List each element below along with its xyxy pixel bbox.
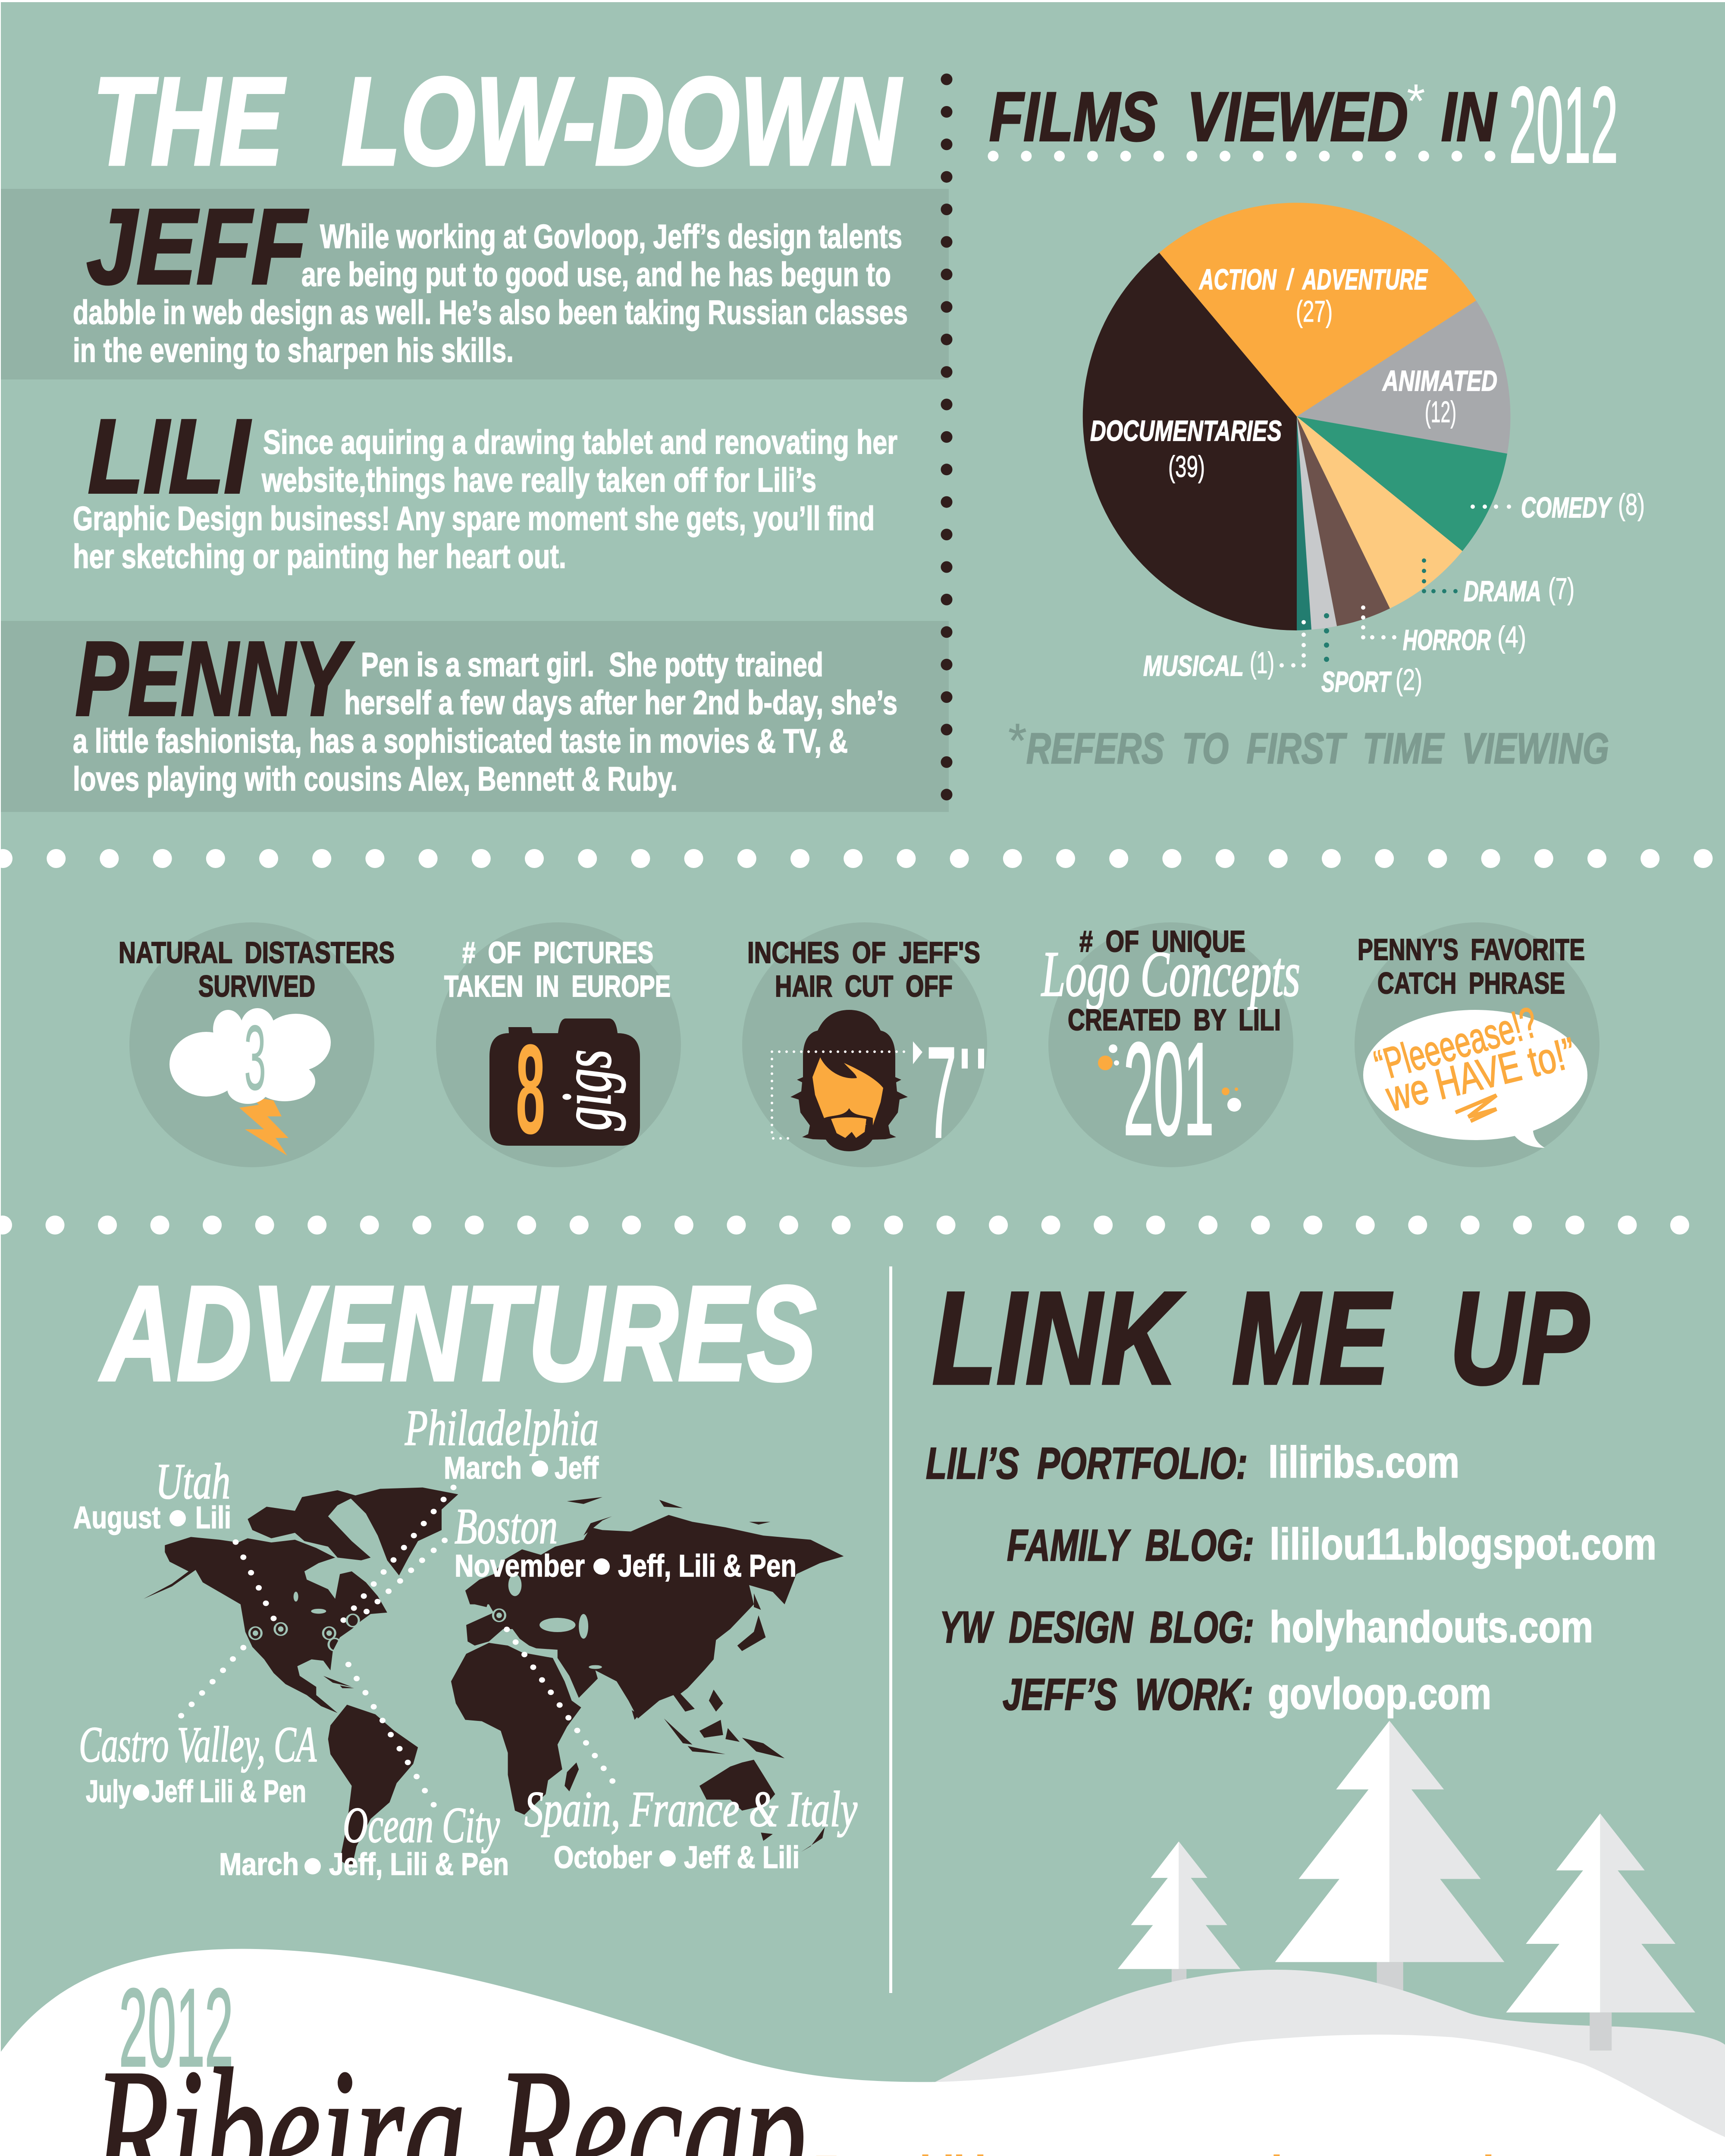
slice: musical [1297, 417, 1311, 630]
profile: Jeff: in the evening to sharpen his skills. [73, 331, 514, 369]
panel: films viewed [989, 65, 1645, 773]
world map [144, 1488, 844, 1868]
panel: ribeira recap [82, 1966, 1653, 2156]
pie labels: (12) [1425, 395, 1456, 429]
link: jeff's work: govloop.com [1268, 1669, 1491, 1718]
stat: logo concepts: 201 [1123, 1015, 1214, 1163]
profile: Lili [73, 398, 897, 575]
right pine tree [1506, 1814, 1695, 2050]
pie labels: DOCUMENTARIES [1090, 415, 1282, 447]
profile: Jeff: JEFF [87, 187, 308, 306]
icon: jeff's face [790, 1010, 908, 1151]
small and large pine trees [1118, 1721, 1505, 1999]
map label: Castro Valley: July [86, 1774, 131, 1809]
heading: films viewed in 2012: IN [1441, 78, 1497, 156]
stat: natural disasters [119, 922, 395, 1167]
stat: logo concepts: # OF UNIQUE [1079, 924, 1245, 958]
heading: link me up [932, 1265, 1589, 1411]
grey snow hill [935, 1970, 1725, 2152]
pie labels: DRAMA [1464, 575, 1541, 608]
speech bubble: we HAVE to!” [1381, 1028, 1580, 1121]
map label: Philadelphia [405, 1400, 599, 1485]
map label: Ocean City: Ocean City [343, 1797, 500, 1853]
map label: Ocean City [219, 1797, 509, 1882]
map label: Castro Valley [79, 1716, 317, 1809]
heading: link me up: LINK [932, 1265, 1185, 1411]
measurement dotted line and arrow [772, 1041, 922, 1138]
heading: films viewed in 2012: FILMS VIEWED [989, 78, 1408, 156]
stat: jeff's hair: HAIR CUT OFF [775, 969, 953, 1003]
profile: Jeff [73, 187, 908, 369]
profile: Penny: Pen is a smart girl. She potty trained [361, 646, 823, 683]
link: yw design blog [940, 1602, 1593, 1652]
decorative confetti dots [1098, 1044, 1241, 1112]
link: family blog [1007, 1520, 1656, 1570]
stat: penny's catch phrase: PENNY'S FAVORITE [1358, 933, 1585, 966]
slice: action / adventure [1159, 203, 1476, 417]
map label: Utah: Utah [156, 1453, 230, 1510]
footnote: * [1008, 714, 1027, 767]
slice: sport [1297, 417, 1337, 630]
profile: Penny: PENNY [75, 620, 354, 737]
map label: Boston: November [455, 1549, 585, 1583]
stat: pictures in europe: TAKEN IN EUROPE [444, 969, 671, 1003]
pie labels [1090, 263, 1645, 698]
map label: Philadelphia: Jeff [555, 1451, 599, 1485]
profile: Lili: her sketching or painting her heart out. [73, 537, 566, 575]
map label: Boston: Jeff, Lili & Pen [618, 1549, 797, 1583]
slice: comedy [1297, 417, 1507, 551]
profile: Penny: a little fashionista, has a sophisticated taste in movies & TV, & [73, 722, 848, 760]
map label: Ocean City: Jeff, Lili & Pen [329, 1847, 509, 1882]
profile: Jeff: While working at Govloop, Jeff’s design talents [320, 217, 902, 255]
heading: adventures: ADVENTURES [98, 1259, 817, 1409]
link: family blog: FAMILY BLOG: [1007, 1520, 1254, 1570]
heading: link me up: ME [1232, 1265, 1393, 1411]
map label: Spain, France & Italy [524, 1781, 857, 1875]
stat: natural disasters: 3 [244, 1006, 266, 1109]
speech bubble [1363, 998, 1587, 1148]
stat: pictures in europe [436, 922, 681, 1167]
profile: Jeff: are being put to good use, and he has begun to [301, 255, 891, 293]
profile: Lili: Since aquiring a drawing tablet and renovating her [263, 423, 897, 461]
link: yw design blog: YW DESIGN BLOG: [940, 1602, 1254, 1652]
pie labels: (8) [1618, 488, 1645, 521]
map label: Spain, France & Italy: Spain, France & Italy [524, 1781, 857, 1837]
stat: jeff's hair [742, 922, 987, 1167]
heading: link me up: UP [1450, 1265, 1589, 1411]
map label: Boston [455, 1498, 797, 1583]
title: the low-down [93, 52, 903, 191]
icon: cloud [169, 1008, 331, 1104]
profile: Lili: LILI [88, 398, 251, 515]
icon: camera: gigs [547, 1050, 626, 1131]
profile: Lili: website,things have really taken off for Lili’s [261, 461, 816, 499]
pie labels: (1) [1250, 646, 1274, 680]
panel: ribeira recap: 2012 [119, 1966, 233, 2090]
link: jeff's work: JEFF’S WORK: [1003, 1670, 1253, 1719]
profile: Jeff: dabble in web design as well. He’s also been taking Russian classes [73, 293, 908, 331]
map label: Utah: Lili [195, 1501, 231, 1535]
pie labels: SPORT [1321, 666, 1392, 698]
heading: films viewed in 2012: * [1407, 75, 1425, 128]
stat: logo concepts: Logo Concepts [1041, 938, 1300, 1010]
pie labels: (2) [1396, 663, 1422, 696]
stat: jeff's hair: INCHES OF JEFF'S [747, 936, 980, 969]
profile: Penny [73, 620, 897, 798]
panel: link me up [926, 1265, 1656, 1719]
slice: horror [1297, 417, 1390, 626]
panel: the low-down [1, 52, 949, 812]
pie labels: (39) [1168, 450, 1205, 483]
link: jeff's work [1003, 1669, 1491, 1719]
map label: Spain, France & Italy: October [554, 1840, 652, 1875]
pie labels: ANIMATED [1382, 365, 1497, 397]
map label: Castro Valley: Jeff Lili & Pen [151, 1774, 306, 1809]
map label: Spain, France & Italy: Jeff & Lili [684, 1840, 800, 1875]
title: the low-down: LOW-DOWN [342, 52, 903, 191]
stat: natural disasters: NATURAL DISTASTERS [119, 936, 395, 969]
stat: logo concepts: CREATED BY LILI [1068, 1003, 1281, 1037]
speech bubble: “Pleeeease!? [1369, 998, 1543, 1090]
stat: natural disasters: SURVIVED [198, 969, 315, 1003]
profile: Penny: loves playing with cousins Alex, Bennett & Ruby. [73, 760, 677, 798]
slice: documentaries [1083, 253, 1297, 630]
profile: Penny: herself a few days after her 2nd b-day, she’s [344, 683, 897, 721]
icon: camera: 8 [516, 1018, 545, 1160]
map label: Utah [73, 1453, 231, 1535]
pie labels: HORROR [1403, 624, 1491, 656]
map label: Utah: August [73, 1501, 160, 1535]
pie labels: MUSICAL [1143, 650, 1244, 682]
stat: pictures in europe: # OF PICTURES [462, 936, 653, 969]
link: lili's portfolio: LILI’S PORTFOLIO: [926, 1438, 1248, 1488]
heading: films viewed in 2012 [989, 65, 1618, 185]
footnote [1008, 714, 1609, 773]
pie labels: COMEDY [1521, 492, 1612, 524]
map route dots and pins [178, 1485, 615, 1808]
stat: penny's catch phrase: CATCH PHRASE [1377, 966, 1565, 1000]
link: yw design blog: holyhandouts.com [1270, 1602, 1593, 1651]
white snow hill [0, 1949, 1725, 2156]
slice: animated [1297, 301, 1510, 454]
pie labels: (27) [1296, 295, 1333, 328]
link: lili's portfolio: liliribs.com [1268, 1438, 1459, 1487]
title: the low-down: THE [93, 52, 287, 191]
pie labels: (4) [1497, 620, 1526, 654]
pie leader dots [1280, 505, 1511, 667]
map label: Castro Valley: Castro Valley, CA [79, 1716, 317, 1773]
profile: Lili: Graphic Design business! Any spare moment she gets, you’ll find [73, 499, 875, 537]
icon: lightning bolt [239, 1097, 289, 1156]
pie labels: ACTION / ADVENTURE [1199, 263, 1428, 296]
pie labels: (7) [1548, 572, 1574, 605]
slice: drama [1297, 417, 1462, 608]
value: 7 inches: 7 [926, 1020, 957, 1165]
map label: Boston: Boston [455, 1498, 558, 1554]
panel: stats row [119, 922, 1600, 1167]
pie chart [1083, 203, 1510, 630]
stat: penny's catch phrase [1355, 922, 1600, 1167]
stat: logo concepts [1041, 922, 1300, 1167]
icon: camera [489, 1018, 640, 1160]
map label: Philadelphia: Philadelphia [405, 1400, 599, 1456]
link: family blog: lililou11.blogspot.com [1270, 1520, 1656, 1569]
panel: adventures [73, 1259, 857, 1882]
map label: Philadelphia: March [444, 1451, 522, 1485]
map label: Ocean City: March [219, 1847, 299, 1882]
